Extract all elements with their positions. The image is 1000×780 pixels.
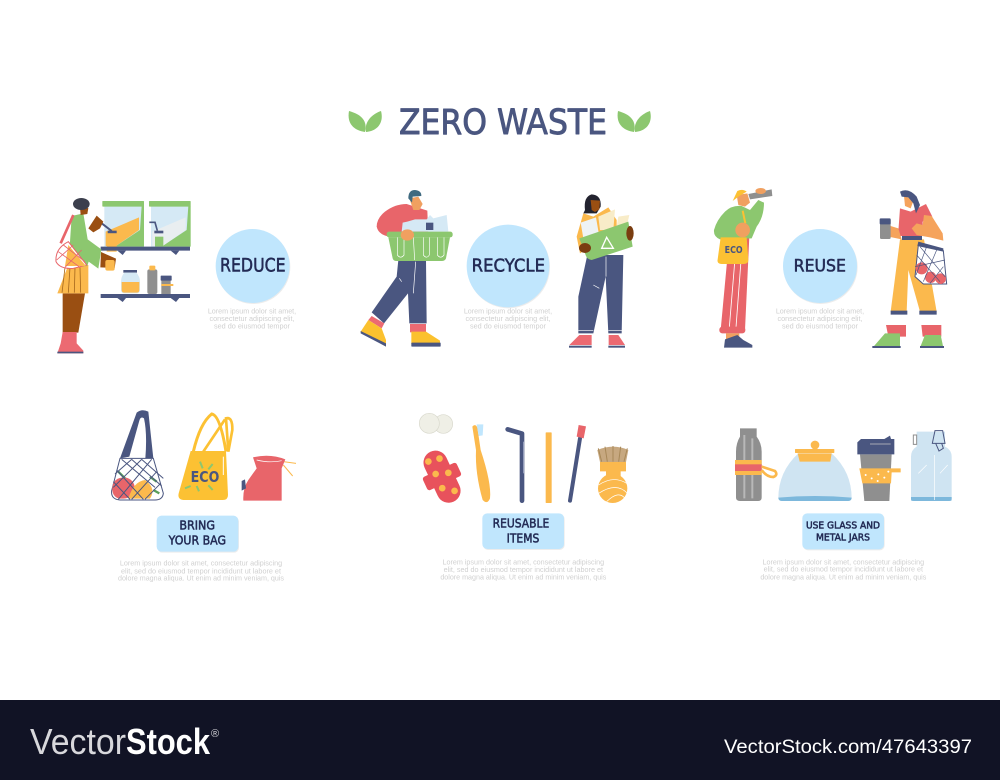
logo wordmark bbox=[30, 721, 219, 762]
title: ZERO WASTE bbox=[399, 103, 607, 143]
circle label: reuse bbox=[783, 229, 858, 304]
icon: eco tote bag bbox=[178, 414, 232, 500]
label box: reusable items: ITEMS bbox=[507, 531, 539, 546]
illustration: woman with cup and net bag bbox=[872, 190, 947, 348]
text block: reduce: consectetur adipiscing elit, bbox=[209, 314, 294, 323]
text block: reuse: consectetur adipiscing elit, bbox=[777, 314, 862, 323]
icon: glass jar bbox=[778, 441, 852, 501]
text block: reusable items: dolore magna aliqua. Ut enim ad minim veniam, quis bbox=[440, 573, 606, 582]
icon: travel cup bbox=[857, 436, 901, 501]
text block: reduce: sed do eiusmod tempor bbox=[214, 321, 290, 330]
text block: reduce bbox=[208, 306, 296, 330]
panel: reduce bbox=[56, 198, 296, 353]
text block: glass and metal jars: dolore magna aliqua. Ut enim ad minim veniam, quis bbox=[760, 572, 926, 581]
text block: reusable items bbox=[440, 558, 606, 582]
text block: reusable items: Lorem ipsum dolor sit amet, consectetur adipiscing bbox=[442, 558, 604, 567]
text block: bring your bag: dolore magna aliqua. Ut enim ad minim veniam, quis bbox=[118, 574, 284, 583]
icon: cotton pads bbox=[419, 413, 453, 433]
text block: recycle: sed do eiusmod tempor bbox=[470, 321, 546, 330]
circle label: recycle: RECYCLE bbox=[472, 256, 545, 276]
label box: use glass and metal jars: USE GLASS AND bbox=[806, 520, 880, 531]
circle label: reduce bbox=[216, 229, 290, 304]
icon: bottle brush bbox=[570, 425, 586, 501]
icon: left leaves bbox=[349, 111, 382, 132]
text block: reuse: sed do eiusmod tempor bbox=[782, 321, 858, 330]
logo wordmark: Vector bbox=[30, 721, 126, 762]
panel: recycle bbox=[361, 190, 634, 348]
panel: glass and metal jars bbox=[735, 428, 952, 581]
icon: bamboo straw bbox=[546, 432, 552, 503]
text block: recycle: consectetur adipiscing elit, bbox=[465, 314, 550, 323]
illustration: woman with net bag bbox=[56, 198, 116, 353]
text block: recycle bbox=[464, 306, 552, 330]
circle label: reuse: REUSE bbox=[794, 256, 846, 275]
circle label: recycle bbox=[467, 225, 550, 308]
logo wordmark: ® bbox=[211, 728, 219, 740]
label box: bring your bag: YOUR BAG bbox=[168, 533, 226, 548]
text block: glass and metal jars: Lorem ipsum dolor sit amet, consectetur adipiscing bbox=[762, 557, 924, 566]
icon: metal bottle bbox=[735, 428, 776, 501]
icon: red pouch bbox=[242, 456, 296, 501]
label box: bring your bag: BRING bbox=[179, 517, 215, 532]
logo wordmark: Stock bbox=[126, 721, 211, 762]
image id: VectorStock.com/47643397 bbox=[724, 737, 972, 758]
icon: net bag with fruit bbox=[112, 410, 163, 500]
icon: reusable pad bbox=[413, 444, 471, 509]
panel: bring your bag bbox=[112, 410, 296, 583]
illustration: woman carrying recycling bin bbox=[569, 194, 634, 348]
label box: use glass and metal jars: METAL JARS bbox=[816, 533, 870, 544]
text block: reuse: Lorem ipsum dolor sit amet, bbox=[776, 306, 864, 315]
illustration: shelves with dispensers bbox=[101, 201, 191, 302]
illustration: man drinking with eco bag: ECO bbox=[725, 245, 743, 256]
text block: reduce: Lorem ipsum dolor sit amet, bbox=[208, 306, 296, 315]
icon: eco tote bag: ECO bbox=[191, 469, 219, 486]
title row bbox=[349, 103, 651, 143]
icon: right leaves bbox=[618, 111, 651, 132]
text block: recycle: Lorem ipsum dolor sit amet, bbox=[464, 306, 552, 315]
footer bar bbox=[0, 700, 1000, 780]
icon: bamboo toothbrush bbox=[472, 424, 490, 502]
text block: glass and metal jars bbox=[760, 557, 926, 581]
label box: reusable items: REUSABLE bbox=[493, 515, 549, 530]
text block: bring your bag: elit, sed do eiusmod tempor incididunt ut labore et bbox=[121, 566, 282, 575]
text block: bring your bag bbox=[118, 559, 284, 583]
label box: reusable items bbox=[482, 513, 565, 550]
icon: flip-top glass bottle bbox=[911, 431, 952, 501]
text block: reuse bbox=[776, 306, 864, 330]
text block: glass and metal jars: elit, sed do eiusmod tempor incididunt ut labore et bbox=[764, 565, 924, 574]
icon: metal straw bbox=[508, 429, 523, 501]
illustration: man drinking with eco bag bbox=[714, 188, 772, 348]
panel: reusable items bbox=[413, 413, 628, 582]
text block: bring your bag: Lorem ipsum dolor sit amet, consectetur adipiscing bbox=[120, 559, 282, 568]
icon: wooden brush bbox=[597, 446, 628, 503]
label box: use glass and metal jars bbox=[802, 513, 885, 550]
text block: reusable items: elit, sed do eiusmod tempor incididunt ut labore et bbox=[444, 565, 604, 574]
illustration: man carrying basket bbox=[361, 190, 453, 347]
circle label: reduce: REDUCE bbox=[220, 256, 286, 277]
label box: bring your bag bbox=[157, 516, 239, 553]
panel: reuse bbox=[714, 188, 947, 348]
